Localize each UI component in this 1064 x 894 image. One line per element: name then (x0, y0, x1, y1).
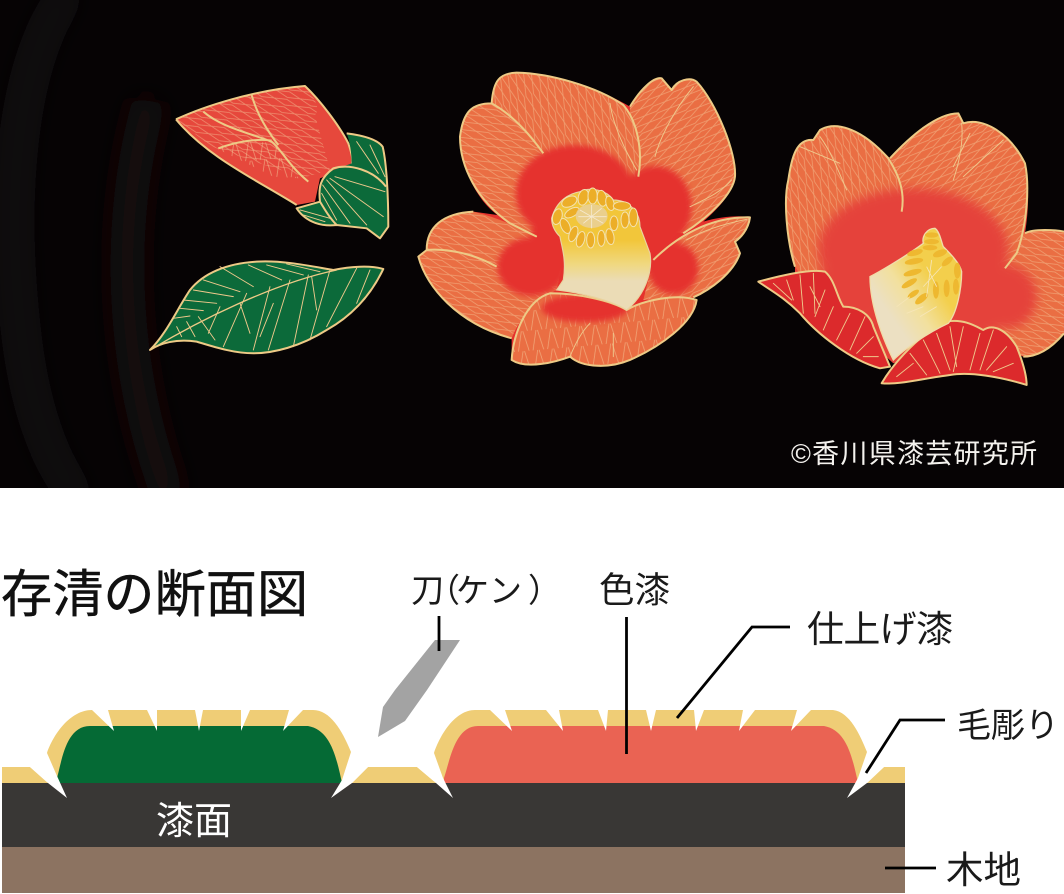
panel: cross-section diagram (2, 570, 1059, 893)
stamen body (870, 228, 962, 360)
finishing lacquer label: 仕上げ漆 (807, 609, 953, 650)
stamen outline (552, 189, 651, 310)
anthers (900, 232, 961, 306)
knife leader line (438, 616, 440, 651)
stamen cluster (870, 228, 962, 360)
leaf veins (173, 264, 370, 350)
flower underlay (786, 113, 1064, 363)
red petal centres (497, 145, 698, 322)
red petal centre (810, 188, 1037, 337)
left upper back petal (492, 74, 639, 176)
icon: engraving knife (378, 640, 460, 737)
leaf blade (150, 261, 383, 353)
bud vein hatch (176, 86, 330, 177)
left lower petal hatch (418, 212, 563, 338)
stamen filaments (578, 205, 607, 228)
icon: green leaf (150, 261, 383, 353)
right lower petal hatch (643, 217, 750, 300)
wood leader line (885, 867, 936, 869)
leaf midrib (150, 270, 337, 350)
sepal outline (297, 133, 388, 238)
engraving leader line (866, 720, 945, 773)
petal outlines (418, 73, 750, 366)
flower stamens (551, 188, 651, 310)
red petal outlines (758, 271, 1027, 385)
petal outlines (786, 113, 1064, 357)
icon: open camellia flower (418, 73, 750, 366)
right upper petal (890, 113, 1027, 268)
icon: side camellia flower (758, 113, 1064, 385)
right lower petal (643, 217, 750, 300)
knife label: 刀（ケン） (411, 572, 561, 609)
bottom petal (512, 293, 697, 366)
copyright credit: ©香川県漆芸研究所 (791, 439, 1037, 469)
bottom petal hatch (512, 293, 697, 366)
background reflections (14, 0, 170, 500)
back petal hatch (494, 74, 639, 176)
bud petals (176, 86, 352, 205)
red colored lacquer (444, 726, 858, 783)
colored lacquer leader line (625, 617, 628, 754)
left red petal veins (773, 273, 878, 357)
stamen filaments (897, 260, 942, 317)
left upper petal (461, 104, 542, 234)
panel: lacquer photograph (0, 0, 1064, 500)
finishing lacquer layer (2, 710, 905, 783)
anthers (551, 188, 638, 248)
stamen centre (576, 204, 608, 228)
left red petal (758, 271, 890, 368)
wood base layer (2, 847, 905, 893)
petal midribs (800, 123, 1003, 190)
right upper petal (627, 78, 735, 233)
lacquer surface layer (2, 783, 905, 847)
lacquer surface label: 漆面 (156, 801, 232, 843)
bottom red petal veins (897, 327, 1013, 377)
engraving label: 毛彫り (957, 707, 1059, 745)
left upper petal hatch (786, 126, 903, 307)
petal midribs (510, 87, 747, 357)
photo background (0, 0, 1064, 488)
flower underlay (469, 96, 744, 352)
bud lower vein hatch (218, 142, 300, 178)
leaf outline (150, 261, 383, 353)
green colored lacquer (57, 726, 342, 783)
stamen cup (552, 189, 651, 310)
left upper petal hatch (461, 104, 544, 232)
colored lacquer label: 色漆 (599, 570, 670, 610)
bottom red petal (882, 321, 1027, 385)
sepal veins (300, 142, 385, 225)
green sepals (297, 133, 388, 238)
left upper petal (786, 126, 903, 307)
right lower petal hatch (983, 230, 1064, 357)
right upper petal hatch (627, 78, 735, 233)
heading: 存清の断面図 (1, 566, 308, 623)
finishing lacquer leader line (677, 627, 790, 718)
left lower petals (418, 212, 563, 338)
icon: camellia bud (176, 86, 388, 238)
right lower petal (983, 230, 1064, 357)
engraved notches (30, 710, 884, 798)
right upper petal hatch (890, 113, 1027, 268)
wood base label: 木地 (946, 849, 1021, 891)
bud outline (176, 86, 352, 205)
